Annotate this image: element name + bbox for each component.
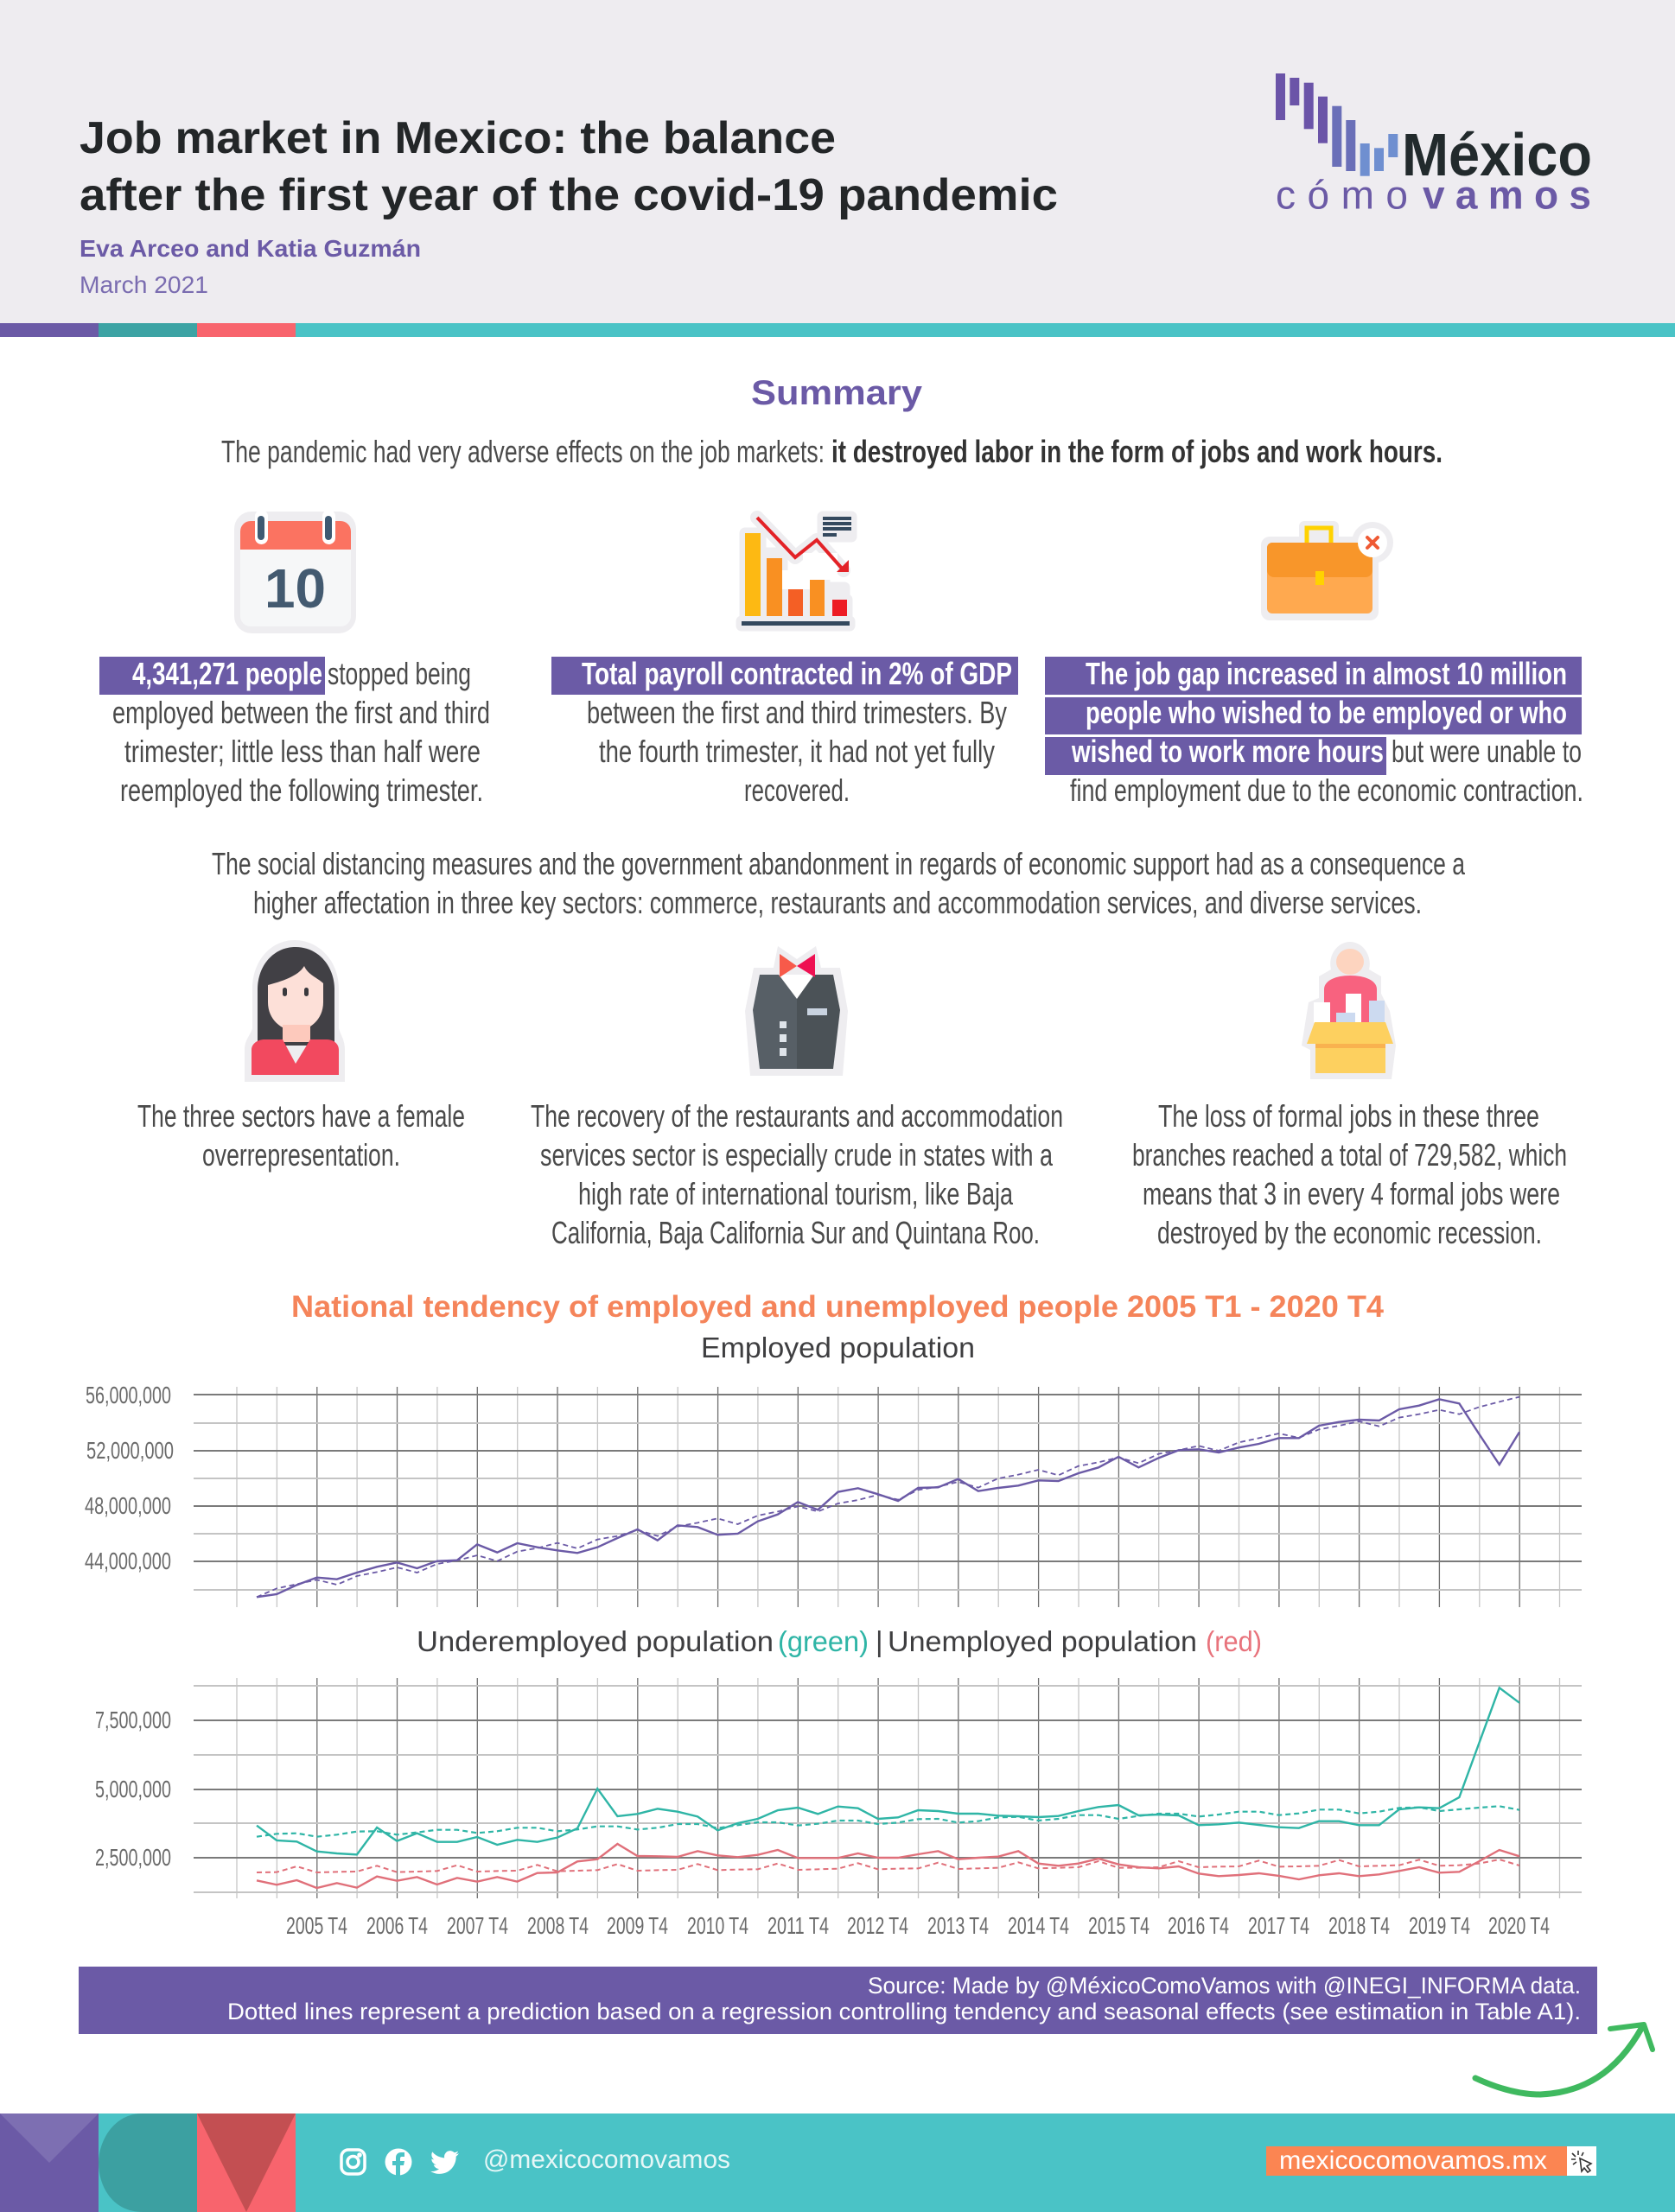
title: Job market in Mexico: the balance — [80, 113, 836, 163]
website button: mexicocomovamos.mx — [1279, 2146, 1547, 2175]
x axis labels: 2014 T4 — [1008, 1912, 1069, 1939]
icon: cursor — [1571, 2151, 1591, 2172]
x axis labels: 2007 T4 — [447, 1912, 508, 1939]
column 1: people stopped being employed: 4,341,271 people — [132, 656, 322, 691]
column 3: job gap: but were unable to — [1392, 734, 1582, 769]
axis labels: 52,000,000 — [86, 1437, 174, 1464]
x axis labels: 2020 T4 — [1488, 1912, 1550, 1939]
column text: loss of formal jobs: The loss of formal jobs in these three — [1158, 1098, 1539, 1134]
employed line — [257, 1399, 1519, 1597]
column text: restaurants and accommodation recovery — [531, 1098, 1063, 1250]
icon: instagram — [341, 2150, 365, 2174]
unemployed line — [257, 1844, 1519, 1888]
chart title: underemployed and unemployed: Underemployed population — [417, 1625, 774, 1657]
x axis labels: 2016 T4 — [1168, 1912, 1229, 1939]
source box: Dotted lines represent a prediction based on a regression controlling tendency and seasonal effects (see estimation in Table A1). — [227, 1999, 1581, 2024]
chart title: underemployed and unemployed: (red) — [1206, 1625, 1262, 1657]
y axis labels: 2,500,000 — [95, 1844, 171, 1871]
authors: Eva Arceo and Katia Guzmán — [80, 235, 421, 262]
icon: calendar: 10 — [264, 557, 326, 620]
line chart: employed population — [85, 1382, 1582, 1607]
y axis labels: 5,000,000 — [95, 1776, 171, 1802]
x axis labels: 2005 T4 — [286, 1912, 347, 1939]
title — [80, 113, 1058, 220]
logo: México cómo vamos: cómo — [1276, 173, 1408, 218]
x axis labels: 2019 T4 — [1409, 1912, 1470, 1939]
column text: restaurants and accommodation recovery: high rate of international tourism, like Baja — [578, 1176, 1014, 1211]
column text: female overrepresentation: overrepresentation. — [202, 1137, 400, 1173]
icon: calendar — [234, 510, 356, 633]
x axis labels: 2018 T4 — [1328, 1912, 1390, 1939]
axis labels: 44,000,000 — [85, 1548, 171, 1574]
intro sentence: it destroyed labor in the form of jobs and work hours. — [831, 434, 1443, 469]
column 2: payroll contraction: recovered. — [744, 772, 850, 808]
axis labels — [85, 1382, 174, 1574]
highlight — [99, 657, 325, 695]
underemployed line — [257, 1688, 1519, 1854]
chart title: underemployed and unemployed: Unemployed population — [888, 1625, 1197, 1657]
x axis labels: 2011 T4 — [767, 1912, 829, 1939]
column text: loss of formal jobs — [1132, 1098, 1567, 1250]
column 2: payroll contraction: between the first and third trimesters. By — [587, 695, 1007, 730]
highlight — [551, 657, 1018, 695]
logo: México cómo vamos: México — [1402, 121, 1592, 188]
column 1: people stopped being employed: reemployed the following trimester. — [120, 772, 483, 808]
column text: restaurants and accommodation recovery: services sector is especially crude in states with a — [540, 1137, 1054, 1173]
column text: female overrepresentation — [137, 1098, 465, 1173]
source box — [79, 1967, 1597, 2034]
x axis labels: 2015 T4 — [1088, 1912, 1150, 1939]
column 2: payroll contraction: Total payroll contracted in 2% of GDP — [582, 656, 1012, 691]
column text: restaurants and accommodation recovery: The recovery of the restaurants and accommodation — [531, 1098, 1063, 1134]
predicted underemployed line — [257, 1806, 1519, 1837]
line chart: underemployed and unemployed — [95, 1678, 1582, 1939]
y axis labels: 7,500,000 — [95, 1707, 171, 1733]
chart title: underemployed and unemployed: (green) — [778, 1625, 869, 1657]
icon: briefcase with cross — [1261, 521, 1393, 620]
icon: woman — [245, 940, 345, 1082]
arrow: green hand drawn — [1475, 2024, 1653, 2094]
column 3: job gap — [1045, 656, 1583, 808]
x axis labels: 2009 T4 — [607, 1912, 668, 1939]
x axis labels: 2006 T4 — [366, 1912, 428, 1939]
x axis labels: 2010 T4 — [687, 1912, 748, 1939]
chart title: underemployed and unemployed: | — [876, 1625, 883, 1657]
y axis labels — [95, 1707, 171, 1871]
axis labels: 56,000,000 — [86, 1382, 171, 1408]
social handle: @mexicocomovamos — [483, 2145, 730, 2174]
icon: falling bar chart — [742, 517, 851, 626]
icon: person with cardboard box — [1302, 942, 1396, 1079]
x axis labels: 2017 T4 — [1248, 1912, 1309, 1939]
x axis labels: 2008 T4 — [527, 1912, 589, 1939]
column 1: people stopped being employed: employed between the first and third — [112, 695, 490, 730]
x axis labels — [286, 1912, 1550, 1939]
chart title: employed population: Employed population — [701, 1332, 975, 1363]
column 3: job gap: wished to work more hours — [1071, 734, 1384, 769]
chart title: underemployed and unemployed — [417, 1625, 1262, 1657]
icon: twitter — [430, 2151, 459, 2174]
column text: loss of formal jobs: destroyed by the economic recession. — [1157, 1215, 1542, 1250]
source box: Source: Made by @MéxicoComoVamos with @INEGI_INFORMA data. — [868, 1973, 1581, 1999]
logo: México cómo vamos: vamos — [1423, 173, 1591, 218]
column 1: people stopped being employed — [99, 656, 490, 808]
column 1: people stopped being employed: stopped being — [328, 656, 471, 691]
intro sentence: The pandemic had very adverse effects on the job markets: — [221, 434, 825, 469]
intro sentence — [221, 434, 1443, 469]
x axis labels: 2012 T4 — [847, 1912, 908, 1939]
heading: national tendency: National tendency of employed and unemployed people 2005 T1 - 2020 T4 — [291, 1290, 1385, 1324]
heading: Summary: Summary — [751, 374, 923, 412]
footer band — [0, 2113, 1675, 2212]
column 2: payroll contraction: the fourth trimester, it had not yet fully — [599, 734, 995, 769]
predicted unemployed line — [257, 1859, 1519, 1872]
icon: facebook — [385, 2148, 411, 2176]
logo: México cómo vamos — [1276, 73, 1592, 218]
paragraph: key sectors — [212, 846, 1466, 920]
axis labels: 48,000,000 — [85, 1492, 171, 1519]
column text: restaurants and accommodation recovery: California, Baja California Sur and Quintana Roo. — [551, 1215, 1040, 1250]
predicted line — [257, 1397, 1519, 1597]
title: after the first year of the covid-19 pandemic — [80, 170, 1058, 220]
column text: female overrepresentation: The three sectors have a female — [137, 1098, 465, 1134]
date: March 2021 — [80, 271, 208, 298]
x axis labels: 2013 T4 — [927, 1912, 989, 1939]
column 2: payroll contraction — [551, 656, 1018, 808]
header band — [0, 0, 1675, 337]
icon: waiter vest with bow tie — [745, 946, 848, 1076]
highlight — [1045, 657, 1582, 775]
column 1: people stopped being employed: trimester; little less than half were — [124, 734, 481, 769]
